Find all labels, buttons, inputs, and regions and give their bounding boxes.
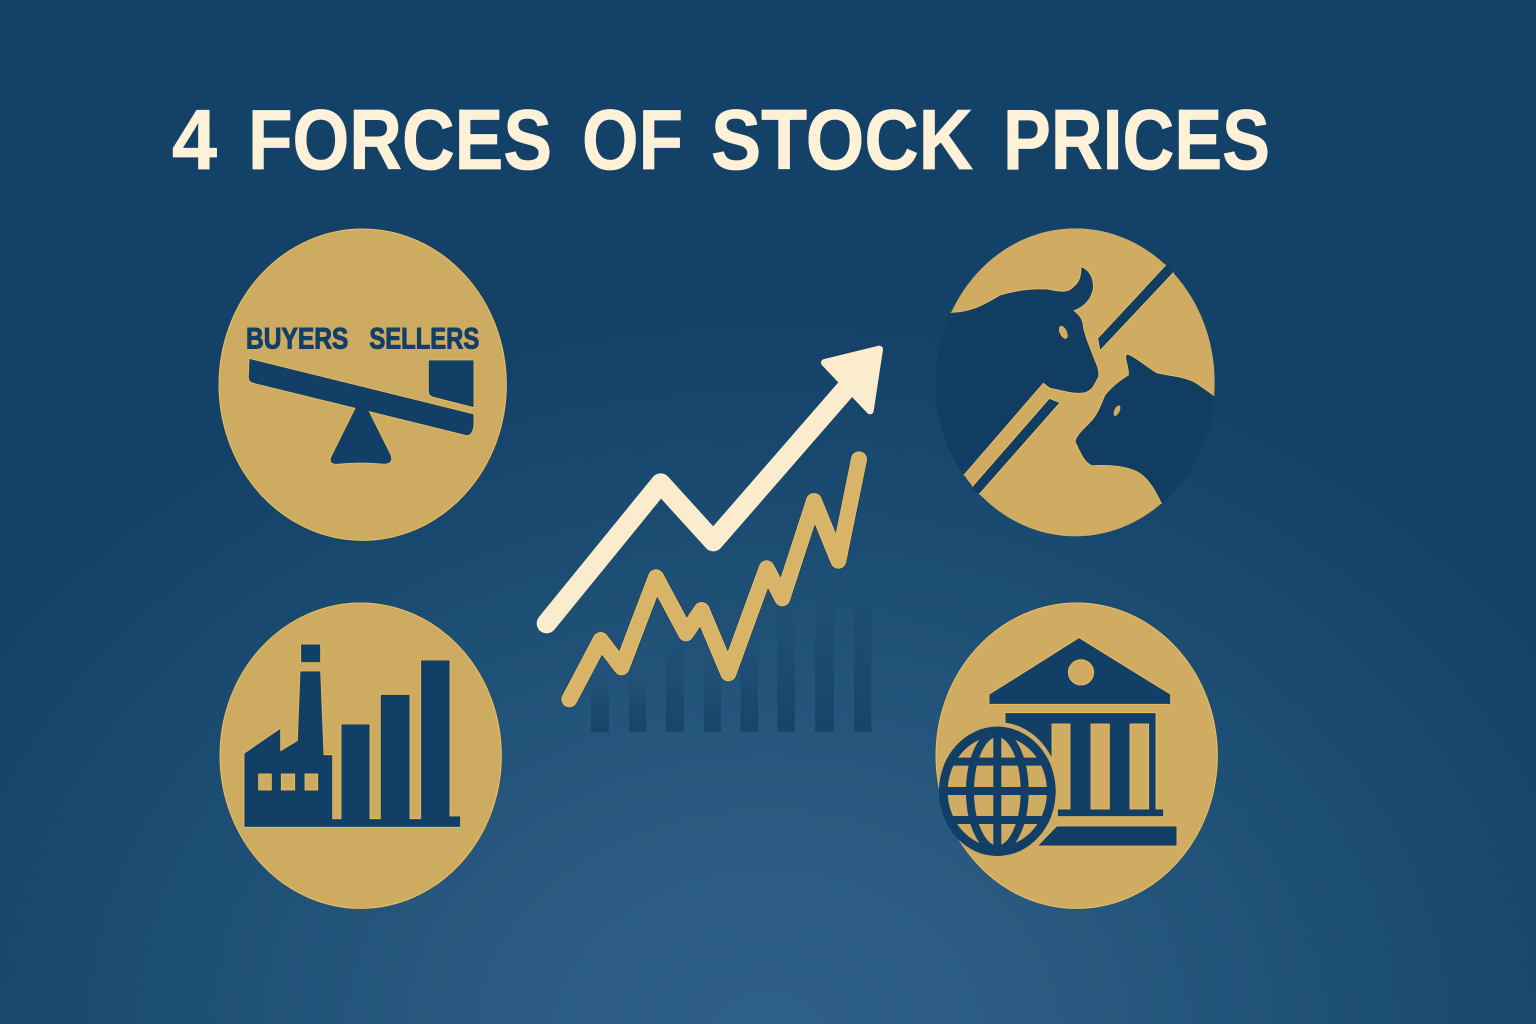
cream arrow: [547, 349, 879, 623]
icon: seesaw: [248, 358, 474, 464]
label: sellers: SELLERS: [369, 323, 479, 356]
gold circle: [936, 228, 1215, 536]
panel: central bank and globe: [933, 603, 1217, 908]
globe grid: [933, 727, 1060, 856]
title: FORCES: [248, 93, 552, 188]
icon: factory with bars: [244, 660, 461, 827]
icon: bull: [936, 266, 1100, 476]
divider: upper strip: [1097, 264, 1174, 352]
icon: bank roof: [989, 638, 1171, 704]
label: buyers: BUYERS: [246, 323, 348, 356]
panel: bull and bear: [938, 228, 1215, 536]
icon: factory windows: [259, 774, 318, 790]
icon: globe: [933, 727, 1060, 856]
icon: bank body: [1005, 713, 1164, 817]
globe land cells: [948, 736, 1047, 847]
divider: lower strip: [972, 398, 1060, 495]
panel: factory and growth bars: [220, 603, 501, 908]
chart: rising price lines: [547, 349, 879, 732]
globe halo: [935, 722, 1060, 861]
gold circle: [220, 603, 501, 908]
arrow shaft: [547, 390, 845, 623]
icon: chimney top: [301, 644, 321, 663]
icon: bank columns: [1052, 724, 1149, 809]
icon: bank base: [1037, 826, 1177, 846]
icon: bear eye: [1113, 405, 1121, 416]
globe disc: [939, 727, 1056, 856]
title: STOCK: [711, 93, 973, 188]
gold circle: [219, 229, 506, 540]
panel: buyers and sellers: [219, 229, 506, 540]
title: [172, 93, 1270, 188]
icon: bull eye: [1057, 325, 1069, 340]
title: OF: [582, 93, 683, 188]
title: 4: [172, 93, 217, 188]
gold circle: [936, 603, 1217, 908]
title: PRICES: [1003, 93, 1270, 188]
icon: bear: [1074, 354, 1215, 504]
faded volume bars: [591, 573, 871, 732]
icon: roof medallion: [1068, 660, 1094, 685]
gold price line: [569, 459, 859, 699]
icon: seller weight: [428, 360, 474, 408]
arrow head: [825, 349, 879, 411]
icon: animals and divider: [936, 264, 1215, 504]
